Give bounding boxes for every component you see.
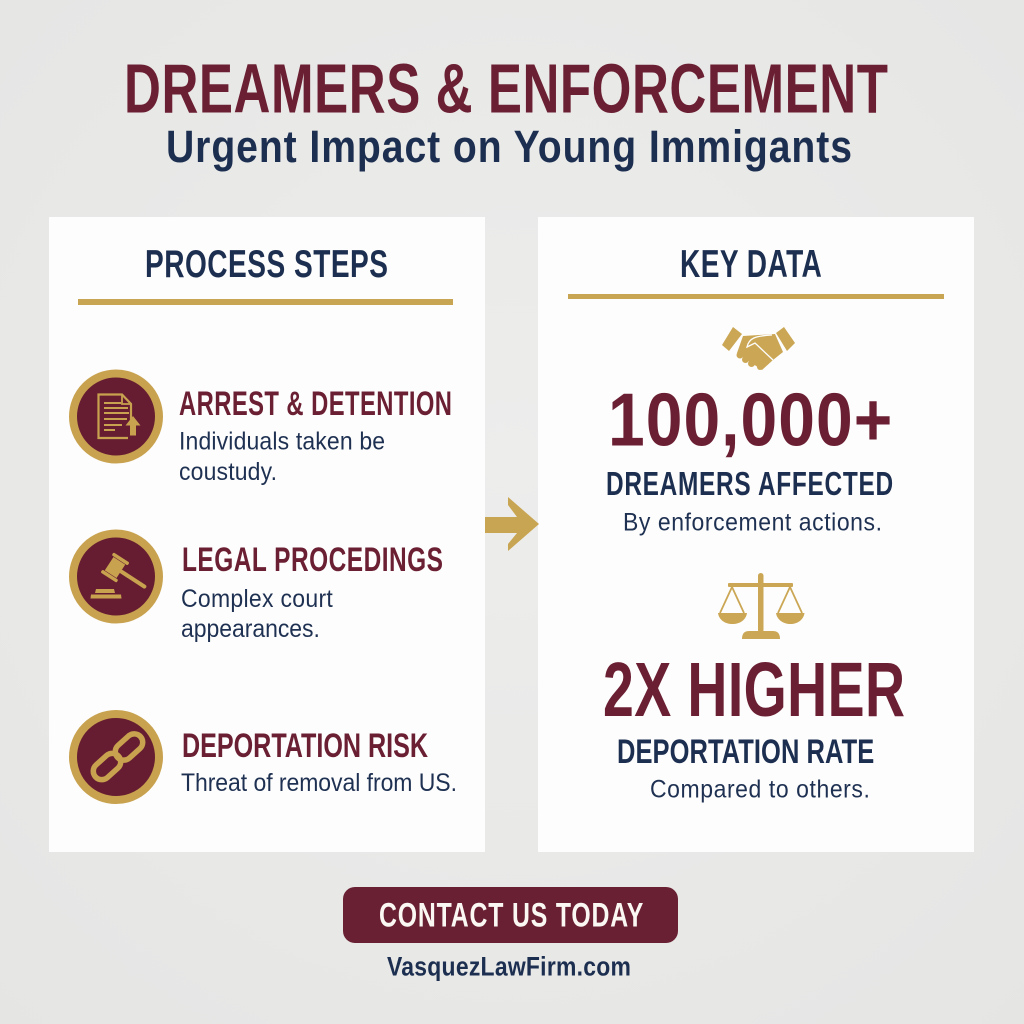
heading: process steps: PROCESS STEPS	[145, 243, 388, 286]
icon: chain link	[73, 714, 159, 800]
stat: dreamers affected	[606, 327, 893, 537]
step description: Individuals taken be	[179, 428, 385, 456]
icon: document with up arrow	[73, 374, 159, 460]
stat description: By enforcement actions.	[623, 509, 882, 537]
step: legal proceedings	[73, 534, 443, 643]
stat label: DEPORTATION RATE	[617, 734, 874, 771]
button: contact us	[343, 887, 678, 943]
big number: 100,000+	[608, 378, 892, 461]
icon: handshake	[722, 327, 795, 370]
stat label: DREAMERS AFFECTED	[606, 467, 893, 503]
stat description: Compared to others.	[650, 776, 870, 804]
big number: 2X HIGHER	[603, 647, 905, 733]
icon: gavel	[73, 534, 159, 620]
icon: scales of justice	[718, 573, 804, 639]
step: arrest and detention	[73, 374, 452, 486]
title: DREAMERS & ENFORCEMENT	[124, 50, 888, 127]
panel: key data	[538, 217, 974, 852]
step title: LEGAL PROCEDINGS	[182, 541, 443, 579]
heading: key data: KEY DATA	[680, 243, 822, 286]
step description: Complex court	[181, 585, 333, 613]
step title: ARREST & DETENTION	[179, 385, 452, 423]
step title: DEPORTATION RISK	[182, 727, 428, 765]
step: deportation risk	[73, 714, 457, 800]
panel: process steps	[49, 217, 485, 852]
step description	[181, 585, 333, 643]
button: contact us: CONTACT US TODAY	[379, 897, 643, 934]
step description	[179, 428, 385, 486]
step description: coustudy.	[179, 458, 277, 486]
subtitle: Urgent Impact on Young Immigants	[166, 121, 852, 172]
step description: appearances.	[181, 615, 320, 643]
step description: Threat of removal from US.	[181, 769, 457, 797]
arrow	[485, 497, 539, 551]
stat: deportation rate	[603, 573, 905, 804]
website: VasquezLawFirm.com	[387, 952, 631, 982]
